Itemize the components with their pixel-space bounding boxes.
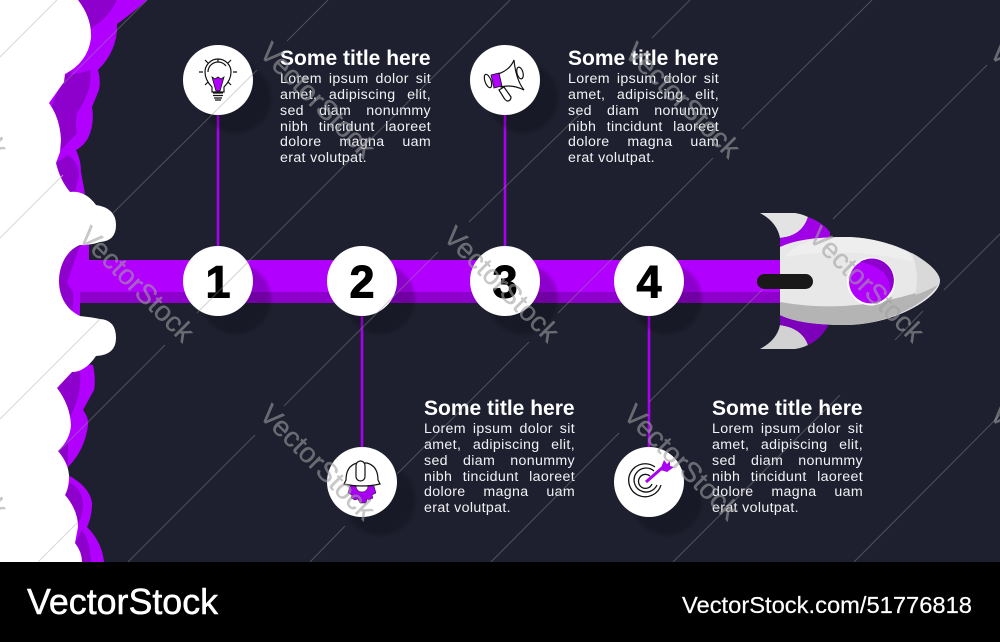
- body text: step 1: nibh tincidunt laoreet: [280, 119, 431, 135]
- body text: step 2: dolore magna uam: [424, 484, 575, 500]
- body text: step 4: dolore magna uam: [712, 484, 863, 500]
- rocket: [757, 213, 940, 349]
- body text: step 2: Lorem ipsum dolor sit: [424, 421, 575, 437]
- body text: step 1: amet, adipiscing elit,: [280, 87, 431, 103]
- watermark text: VectorStock: [438, 220, 566, 349]
- body text: step 3: dolore magna uam: [568, 134, 719, 150]
- body text: step 3: sed diam nonummy: [568, 103, 719, 119]
- body text: step 1: sed diam nonummy: [280, 103, 431, 119]
- footer logo: VectorStock: [27, 581, 219, 622]
- rocket window: [847, 258, 895, 306]
- step 4 number: 4: [636, 256, 662, 308]
- body text: step 1: erat volutpat.: [280, 150, 367, 166]
- step 4 number: [614, 246, 684, 316]
- body text: step 3: nibh tincidunt laoreet: [568, 119, 719, 135]
- text block: step 3: [568, 47, 719, 166]
- icon: light bulb: [183, 45, 253, 115]
- body text: step 3: Lorem ipsum dolor sit: [568, 71, 719, 87]
- body text: step 1: Lorem ipsum dolor sit: [280, 71, 431, 87]
- body text: step 2: [424, 421, 575, 516]
- step 1 number: [183, 246, 253, 316]
- body text: step 4: Lorem ipsum dolor sit: [712, 421, 863, 437]
- body text: step 4: sed diam nonummy: [712, 453, 863, 469]
- body text: step 2: sed diam nonummy: [424, 453, 575, 469]
- connector lines: [217, 112, 650, 450]
- body text: step 4: nibh tincidunt laoreet: [712, 469, 863, 485]
- watermark text: [0, 36, 1000, 527]
- body text: step 3: amet, adipiscing elit,: [568, 87, 719, 103]
- body text: step 2: amet, adipiscing elit,: [424, 437, 575, 453]
- body text: step 4: erat volutpat.: [712, 500, 799, 516]
- body text: step 1: dolore magna uam: [280, 134, 431, 150]
- purple smoke: top: [40, 0, 147, 200]
- watermark text: VectorStock: [619, 36, 747, 165]
- watermark text: VectorStock: [254, 36, 382, 165]
- step 1 number: 1: [205, 256, 231, 308]
- step 3 number: 3: [492, 256, 518, 308]
- text block: step 1: [280, 47, 431, 166]
- rocket slot: [757, 274, 813, 289]
- heading: step 1: Some title here: [280, 47, 431, 70]
- icon: target with arrow: [614, 447, 684, 517]
- body text: step 2: nibh tincidunt laoreet: [424, 469, 575, 485]
- white cloud: [0, 0, 116, 562]
- heading: step 3: Some title here: [568, 47, 719, 70]
- body text: step 4: [712, 421, 863, 516]
- icon: helmet and gear: [327, 447, 397, 517]
- heading: step 4: Some title here: [712, 397, 863, 420]
- purple smoke: bottom: [40, 360, 104, 562]
- timeline bar: [80, 260, 780, 303]
- circle shadows: [201, 63, 702, 535]
- step 2 number: 2: [349, 256, 375, 308]
- watermark text: VectorStock: [73, 220, 201, 349]
- icon: megaphone: [470, 45, 540, 115]
- step 3 number: [470, 246, 540, 316]
- body text: step 2: erat volutpat.: [424, 500, 511, 516]
- watermark text: VectorStock: [618, 398, 746, 527]
- footer band: [0, 562, 1000, 642]
- watermark text: VectorStock: [254, 398, 382, 527]
- footer image id: VectorStock.com/51776818: [682, 592, 972, 618]
- body text: step 4: amet, adipiscing elit,: [712, 437, 863, 453]
- rocket exhaust cap: [59, 244, 89, 316]
- text block: step 2: [424, 397, 575, 516]
- text block: step 4: [712, 397, 863, 516]
- watermark diagonal lines on cloud: [0, 0, 100, 562]
- body text: step 3: erat volutpat.: [568, 150, 655, 166]
- body text: step 3: [568, 71, 719, 166]
- watermark text: VectorStock: [803, 220, 931, 349]
- heading: step 2: Some title here: [424, 397, 575, 420]
- body text: step 1: [280, 71, 431, 166]
- step 2 number: [327, 246, 397, 316]
